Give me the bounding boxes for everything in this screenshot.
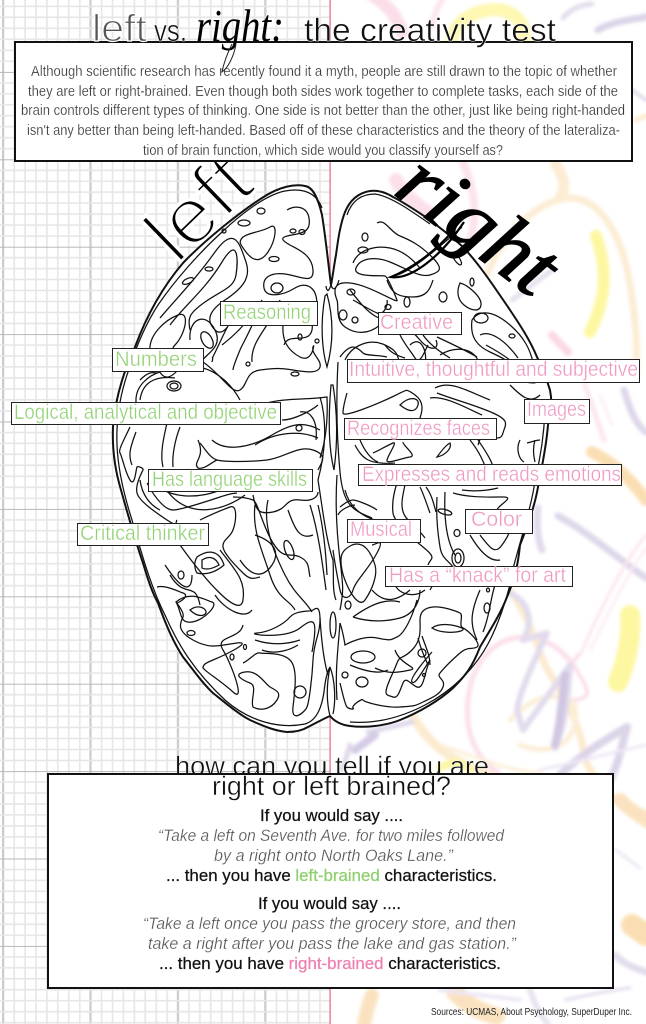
- big rotated word: left: left: [127, 136, 269, 278]
- intro text panel: [15, 42, 632, 161]
- intro text panel: tion of brain function, which side would you classify yourself as?: [143, 143, 503, 159]
- label: Logical, analytical and objective: Logical, analytical and objective: [14, 401, 277, 424]
- label: Numbers: Numbers: [115, 348, 197, 371]
- label: Musical: Musical: [350, 518, 412, 541]
- left-brained example: ... then you have left-brained characteristics.: [166, 866, 497, 885]
- left brain labels: [12, 301, 318, 546]
- center dividing line: [329, 0, 331, 1024]
- title: the creativity test: [304, 12, 556, 48]
- label: Reasoning: Reasoning: [223, 301, 311, 324]
- right-brained example: ... then you have right-brained characteristics.: [159, 954, 501, 973]
- brain illustration: [113, 185, 551, 732]
- right-brained example: If you would say ....: [258, 894, 401, 913]
- left-brained example: “Take a left on Seventh Ave. for two miles followed: [158, 826, 504, 845]
- title: [92, 0, 556, 72]
- label: Critical thinker: Critical thinker: [80, 522, 205, 545]
- right hemisphere folds: [333, 222, 540, 709]
- label: Color: Color: [471, 508, 522, 531]
- right-brained example: [143, 894, 517, 973]
- watercolor scribbles: right half: [340, 0, 646, 1024]
- central fissure lines: [318, 280, 372, 700]
- bottom panel: how to tell: [48, 771, 613, 988]
- heading line one, tucked behind the panel: how can you tell if you are: [175, 751, 489, 781]
- heading line two: right or left brained?: [212, 771, 451, 801]
- left-brained example: [158, 806, 504, 885]
- brain outline: [113, 185, 551, 732]
- big rotated script word: right: right: [381, 134, 579, 316]
- script swash under the g: [391, 222, 464, 277]
- left-brained example: by a right onto North Oaks Lane.”: [214, 846, 454, 865]
- title: right:: [196, 0, 284, 51]
- label: Images: Images: [527, 398, 586, 421]
- script tail of the g running into the panel: [222, 44, 236, 72]
- label: Recognizes faces: Recognizes faces: [347, 417, 490, 440]
- right brain labels: [344, 311, 640, 587]
- left-brained example: If you would say ....: [260, 806, 403, 825]
- label: Has language skills: Has language skills: [152, 468, 307, 491]
- inner double contour lines: [117, 190, 545, 726]
- title: vs.: [154, 13, 187, 48]
- label: Creative: Creative: [380, 311, 453, 334]
- label: Expresses and reads emotions: Expresses and reads emotions: [362, 463, 621, 486]
- left hemisphere folds: [120, 207, 327, 716]
- graph paper background: left half: [0, 0, 330, 1024]
- right-brained example: take a right after you pass the lake and gas station.”: [148, 934, 517, 953]
- label: Color: [466, 508, 532, 534]
- label: Has a knack for art: Has a “knack” for art: [389, 564, 566, 587]
- title: left: [92, 8, 147, 50]
- right-brained example: “Take a left once you pass the grocery store, and then: [143, 914, 516, 933]
